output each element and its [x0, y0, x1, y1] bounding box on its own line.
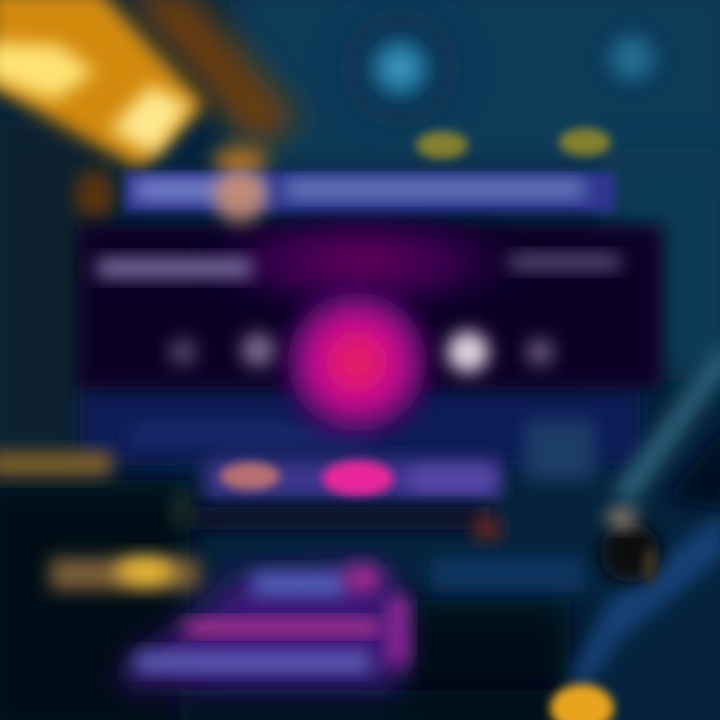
panel heading right	[510, 254, 620, 270]
pink button bar	[205, 460, 500, 498]
small yellow tabs	[416, 128, 611, 159]
blue bar right	[430, 558, 585, 592]
golden ceiling light	[0, 0, 300, 221]
panel top glow	[187, 204, 537, 320]
golden lamp bottom	[550, 684, 614, 720]
gold label left lower	[50, 557, 200, 590]
bottom purple panel	[115, 564, 410, 685]
panel heading left	[97, 258, 252, 278]
dark strip under bar	[172, 492, 501, 541]
right diagonal beam	[568, 340, 720, 690]
small dots row	[170, 331, 554, 373]
central magenta glow	[273, 278, 441, 446]
main dark panel	[78, 204, 663, 446]
mechanical joint	[600, 508, 660, 583]
speaker circles top	[340, 8, 670, 128]
gold label left upper	[0, 452, 112, 476]
lower blue section	[80, 385, 640, 480]
title bar	[125, 167, 615, 223]
